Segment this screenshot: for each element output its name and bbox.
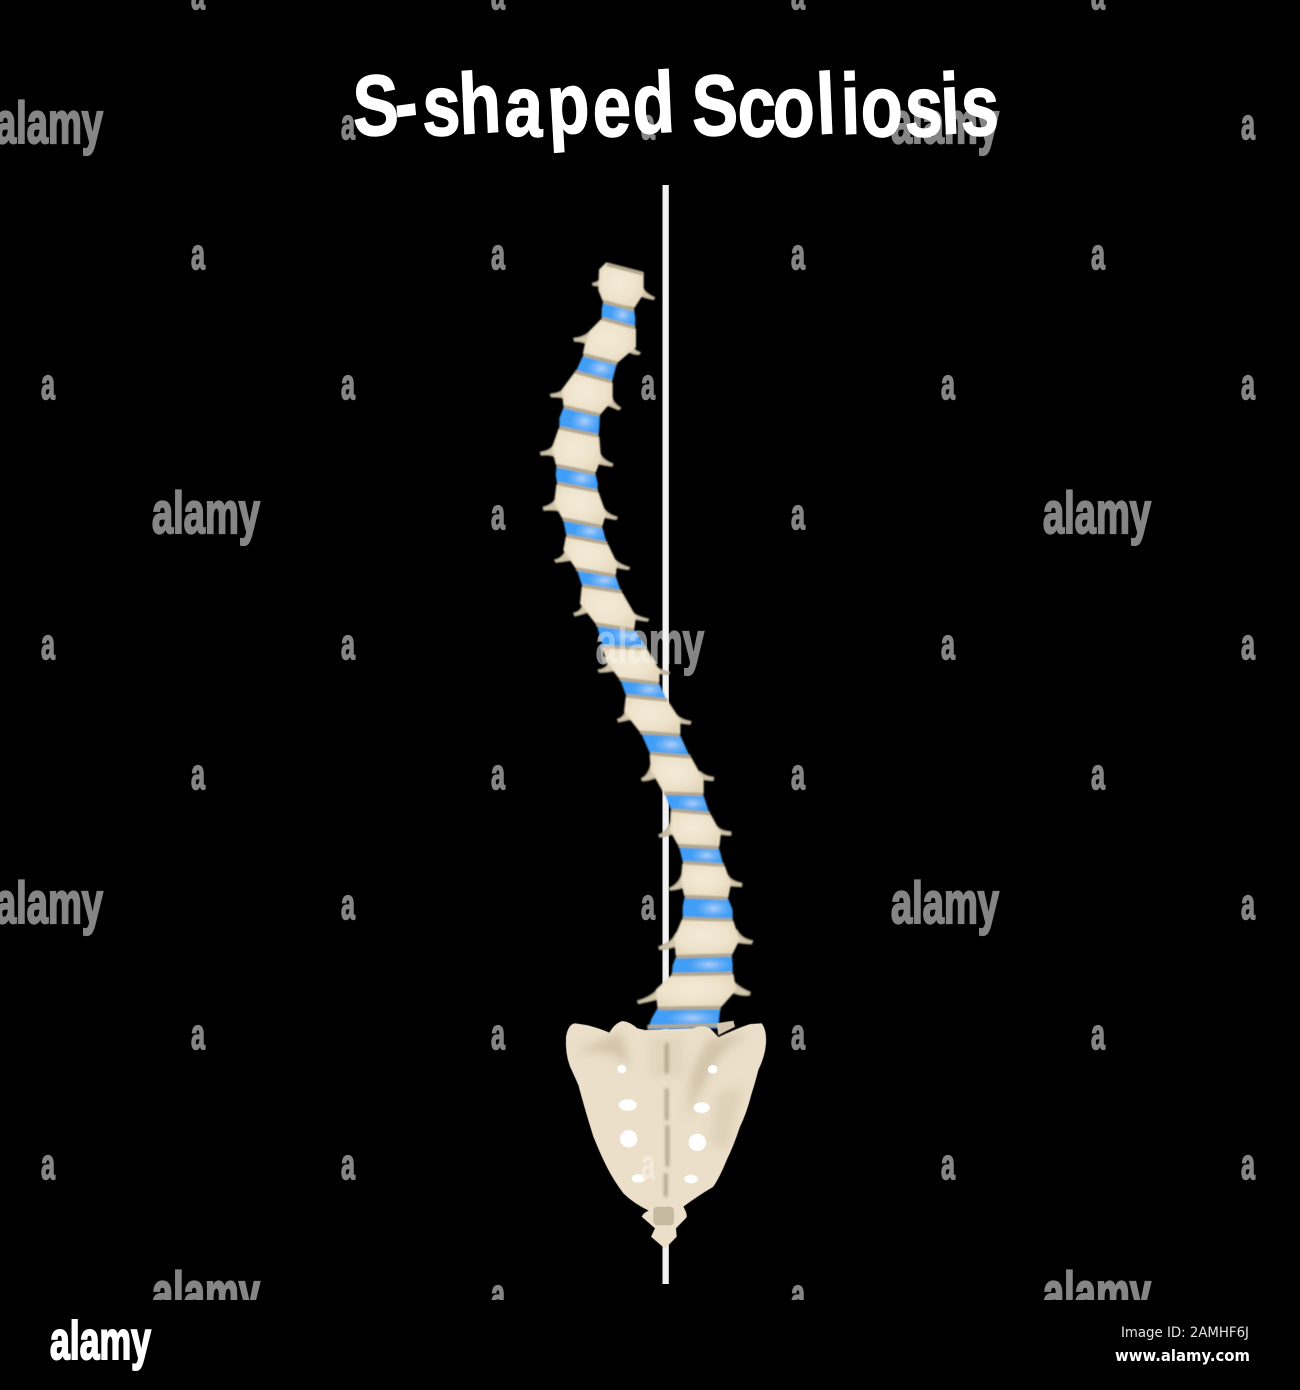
coccygeal opening: [653, 1207, 674, 1225]
watermark pattern: a: [341, 620, 355, 669]
watermark pattern: a: [641, 360, 655, 409]
watermark pattern: alamy: [1043, 481, 1151, 546]
end plates upper: [557, 264, 643, 630]
transverse processes lower: [598, 663, 752, 1003]
watermark pattern: a: [491, 1010, 505, 1059]
watermark pattern: a: [1241, 1140, 1255, 1189]
watermark pattern: alamy: [1043, 1261, 1151, 1326]
watermark pattern: a: [191, 750, 205, 799]
watermark pattern: a: [1091, 750, 1105, 799]
watermark pattern: a: [1091, 230, 1105, 279]
watermark pattern: a: [341, 1140, 355, 1189]
sacral foramina: [617, 1065, 717, 1183]
vertebral bodies lower: [603, 648, 738, 1007]
right process behind sacrum: [717, 1021, 735, 1035]
watermark pattern: a: [191, 230, 205, 279]
watermark on sacrum: a: [641, 1140, 655, 1189]
watermark pattern: a: [791, 230, 805, 279]
title: S-shaped Scoliosis: [351, 54, 999, 155]
watermark pattern: a: [1241, 100, 1255, 149]
watermark pattern: a: [791, 1010, 805, 1059]
watermark pattern: a: [791, 490, 805, 539]
watermark pattern: a: [1241, 880, 1255, 929]
vertebral bodies upper: [553, 263, 643, 628]
watermark pattern: a: [791, 1270, 805, 1319]
watermark pattern: a: [491, 490, 505, 539]
sacrum outline: [566, 1021, 766, 1249]
transverse processes upper: [541, 278, 654, 621]
watermark pattern: a: [941, 1140, 955, 1189]
sacrum shading: [575, 1033, 750, 1150]
image id: Image ID: 2AMHF6J: [1121, 1325, 1249, 1341]
watermark pattern: a: [1091, 1010, 1105, 1059]
lower spine: lumbar curve: [598, 647, 752, 1030]
watermark pattern: a: [941, 620, 955, 669]
discs lower: [619, 677, 733, 1030]
watermark pattern: a: [641, 100, 655, 149]
watermark pattern: alamy: [891, 91, 999, 156]
bottom bar: [0, 1300, 1300, 1390]
watermark pattern: a: [491, 1270, 505, 1319]
watermark over bone: alamy: [596, 611, 704, 676]
upper spine: thoracic curve: [541, 263, 654, 648]
website: www.alamy.com: [1115, 1346, 1250, 1365]
watermark pattern: a: [941, 360, 955, 409]
sacrum: [566, 1021, 766, 1249]
watermark pattern: a: [41, 360, 55, 409]
watermark pattern: a: [1241, 620, 1255, 669]
median crest: [666, 1043, 667, 1197]
watermark pattern: a: [491, 230, 505, 279]
watermark pattern: a: [341, 880, 355, 929]
watermark pattern: a: [41, 620, 55, 669]
watermark pattern: a: [341, 100, 355, 149]
watermark pattern: alamy: [596, 611, 704, 676]
discs upper: [556, 300, 647, 648]
watermark pattern: a: [791, 750, 805, 799]
watermark pattern: a: [641, 880, 655, 929]
watermark pattern: a: [341, 360, 355, 409]
spine: [541, 263, 752, 1030]
watermark pattern: a: [191, 1010, 205, 1059]
watermark pattern: a: [1241, 360, 1255, 409]
watermark pattern: a: [41, 1140, 55, 1189]
end plates lower: [603, 647, 733, 1027]
watermark pattern: alamy: [891, 871, 999, 936]
alamy logo: alamy: [50, 1311, 151, 1371]
watermark pattern: alamy: [152, 1261, 260, 1326]
watermark pattern: alamy: [152, 481, 260, 546]
watermark pattern: a: [491, 750, 505, 799]
vertical reference line: [662, 185, 669, 1284]
